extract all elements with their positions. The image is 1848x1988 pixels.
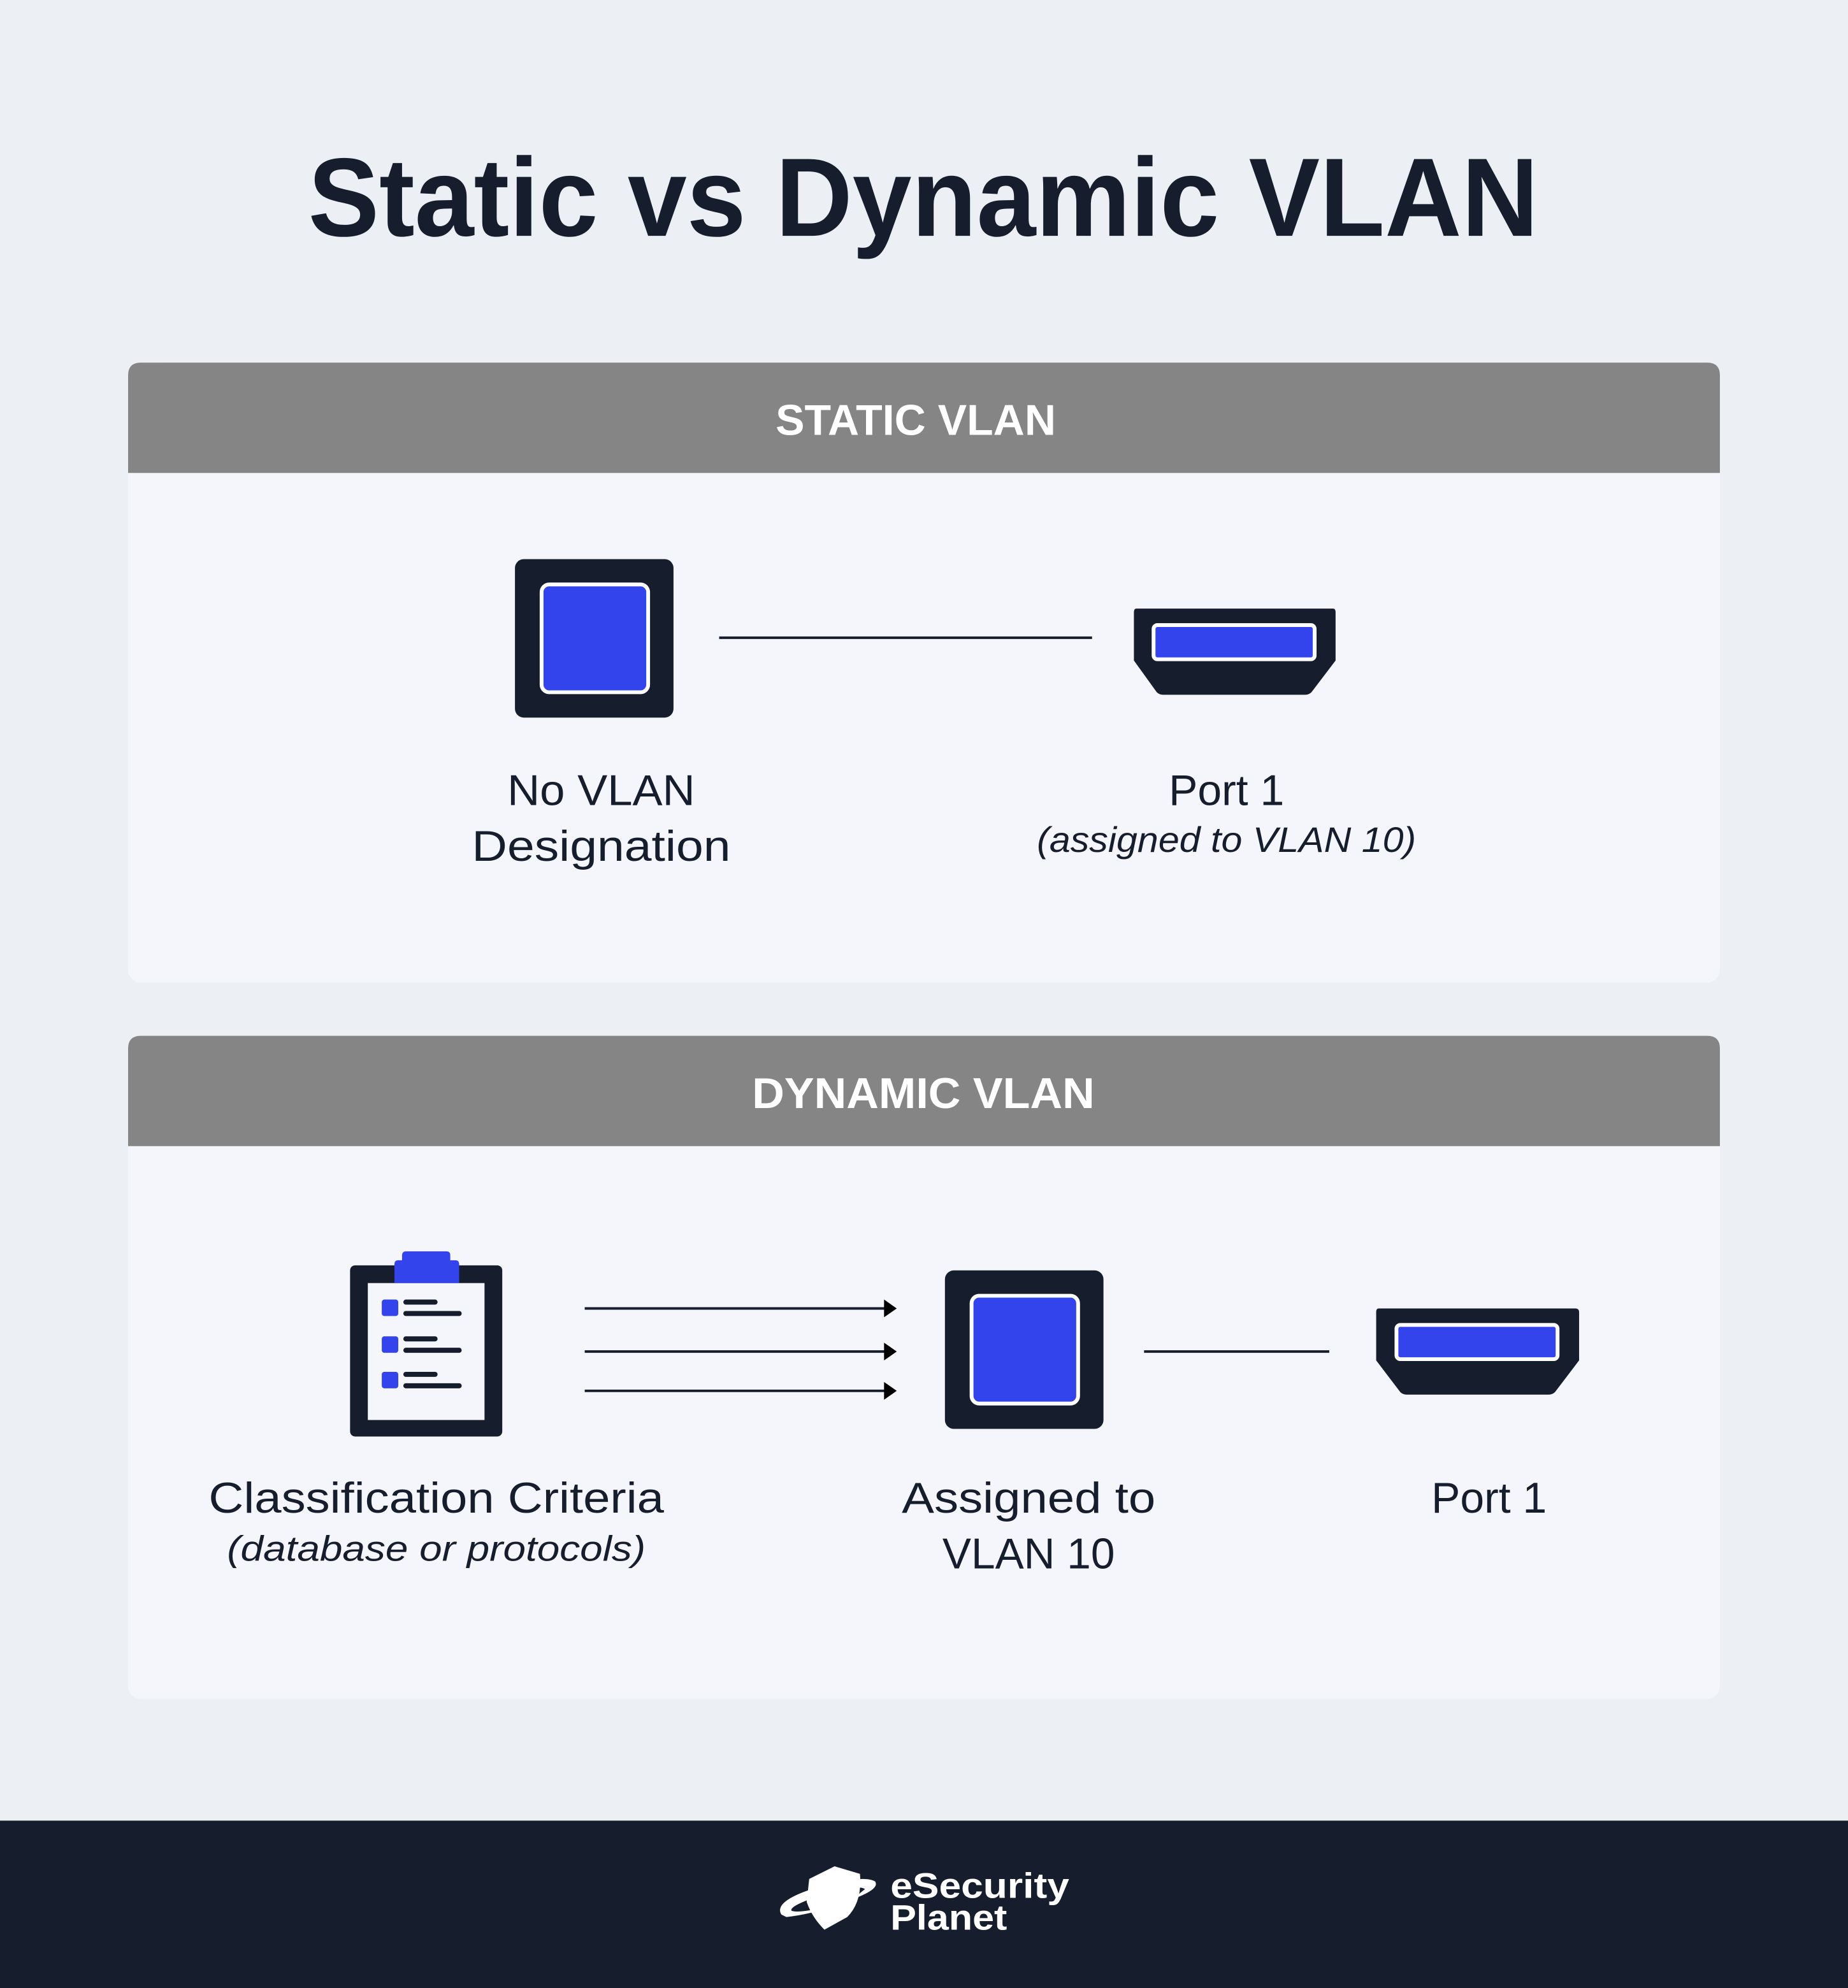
- label: classification criteria: Classification Criteria: [208, 1474, 664, 1522]
- logo text: [890, 1866, 1069, 1937]
- connector line dynamic: [1144, 1351, 1329, 1352]
- panel header: dynamic: [128, 1036, 1720, 1146]
- icon: chip (dynamic): [945, 1271, 1104, 1429]
- label: classification criteria: [208, 1474, 664, 1568]
- icon: port (dynamic): [1376, 1308, 1579, 1395]
- logo text: eSecurity: [890, 1866, 1069, 1906]
- connector line static: [719, 637, 1092, 638]
- label: no vlan designation: No VLAN: [507, 767, 695, 815]
- label: port 1 dynamic: Port 1: [1431, 1474, 1547, 1522]
- label: assigned to vlan 10: Assigned to: [902, 1474, 1155, 1522]
- icon: chip (static): [515, 559, 674, 717]
- label: no vlan designation: [472, 767, 730, 870]
- panel: dynamic vlan: [128, 1036, 1720, 1699]
- icon: clipboard: [350, 1251, 502, 1436]
- logo text: Planet: [890, 1898, 1007, 1937]
- footer: [0, 1820, 1848, 1988]
- label: assigned to vlan 10: [902, 1474, 1155, 1578]
- label: port 1 static: Port 1: [1169, 767, 1284, 815]
- panel header: static: [128, 363, 1720, 473]
- panel header: static: STATIC VLAN: [776, 397, 1056, 444]
- panel: static vlan: [128, 363, 1720, 983]
- label: no vlan designation: Designation: [472, 823, 730, 870]
- panel header: dynamic: DYNAMIC VLAN: [752, 1070, 1095, 1118]
- label: assigned to vlan 10: VLAN 10: [942, 1530, 1115, 1578]
- icon: logo shield planet: [780, 1866, 876, 1929]
- title: Static vs Dynamic VLAN: [308, 135, 1538, 260]
- label: port 1 static: (assigned to VLAN 10): [1037, 820, 1416, 860]
- label: classification criteria: (database or protocols): [227, 1529, 646, 1568]
- label: port 1 static: [1037, 767, 1416, 860]
- arrows: [585, 1300, 897, 1400]
- icon: port (static): [1134, 609, 1336, 695]
